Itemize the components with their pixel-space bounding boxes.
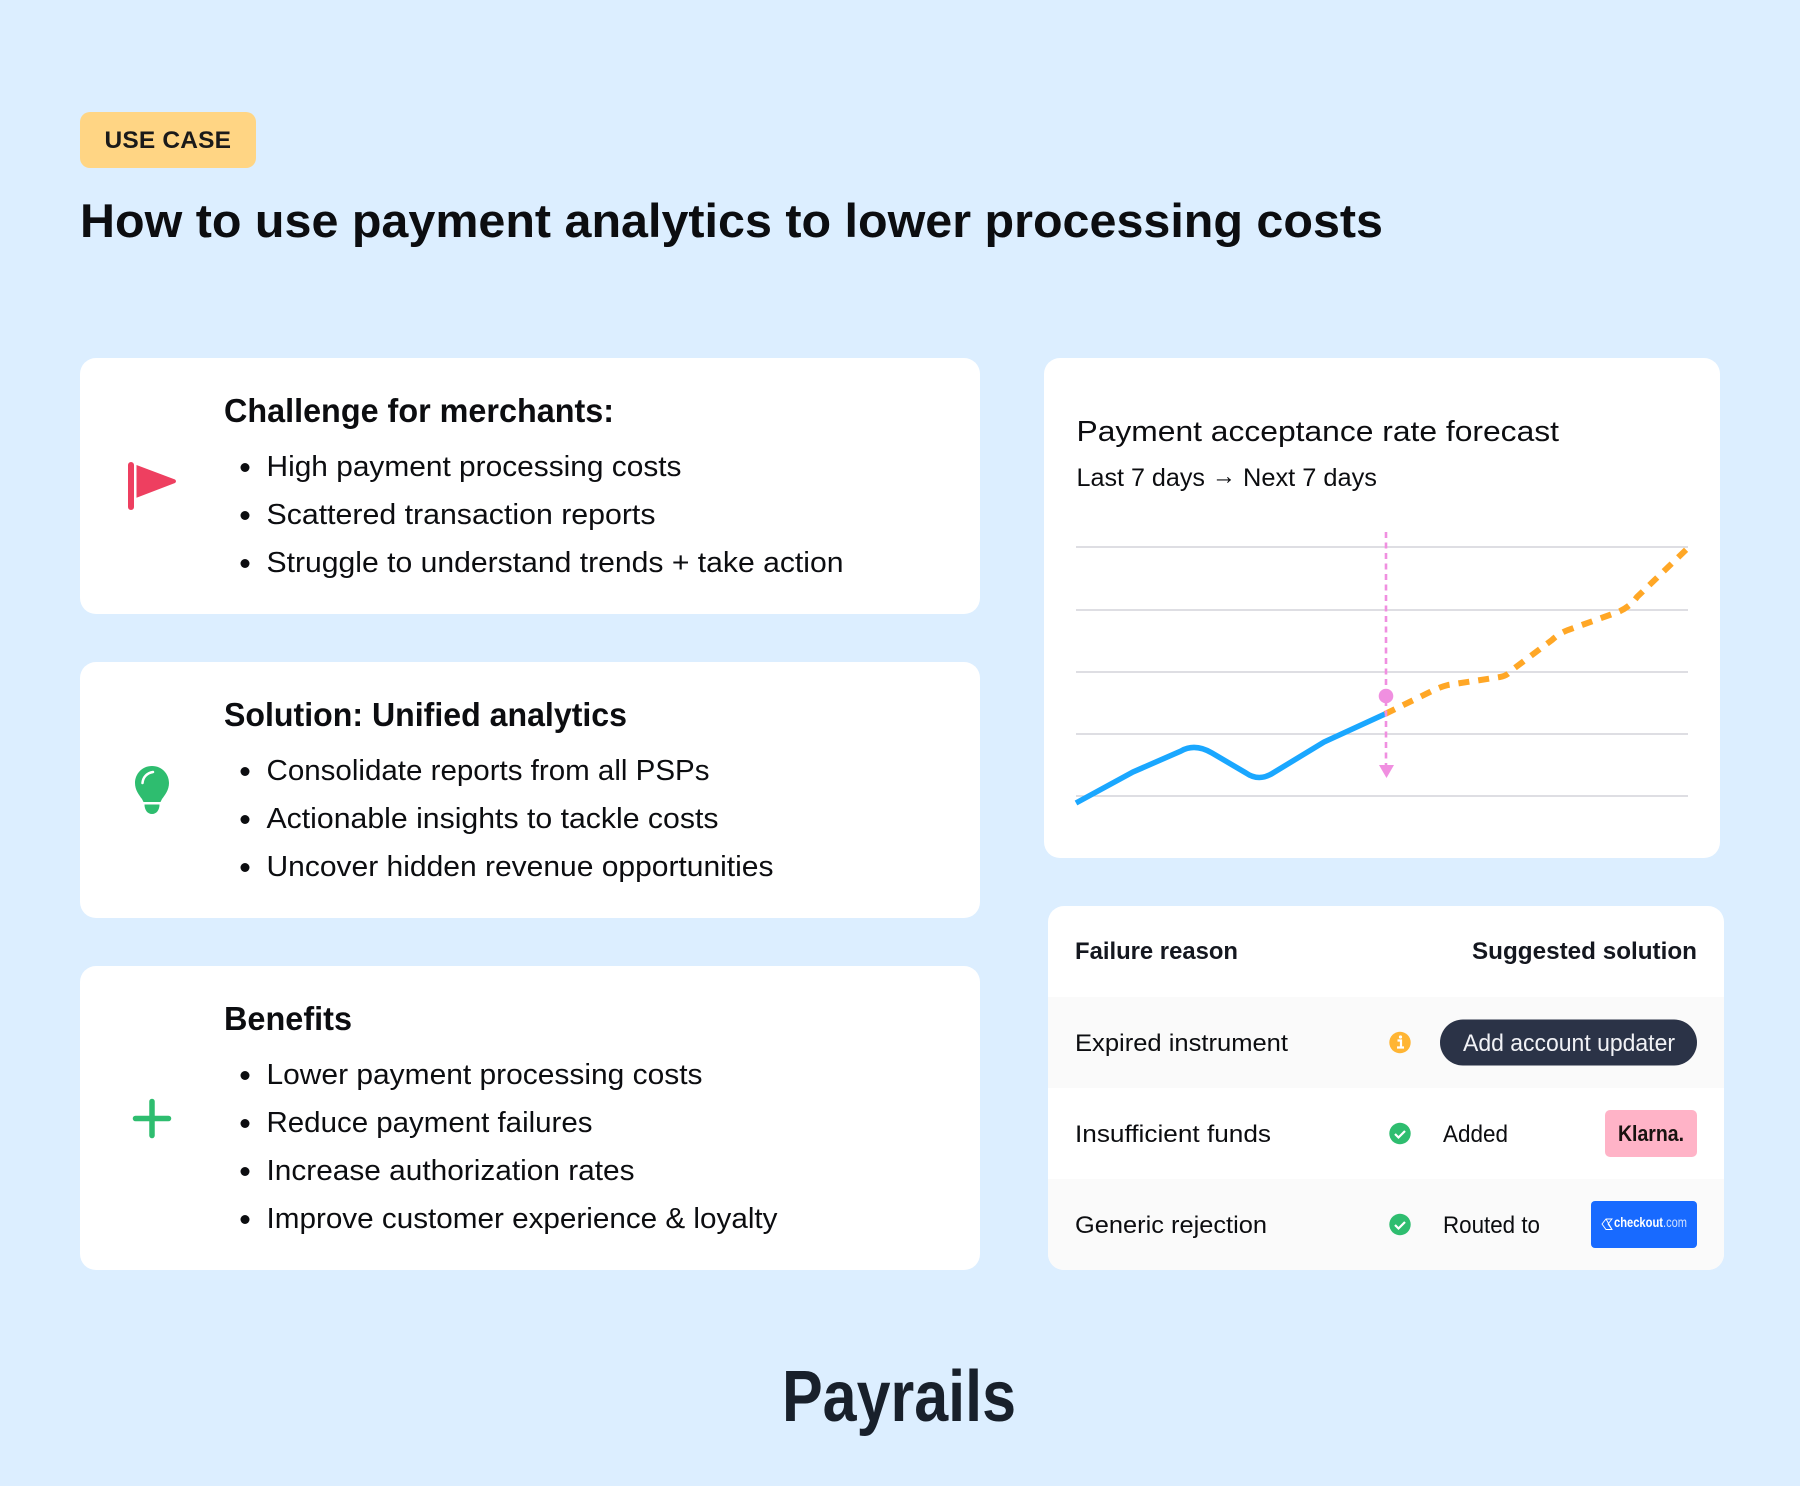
logo: klarna: Klarna. bbox=[1618, 1121, 1684, 1146]
button: add account updater bbox=[1440, 1020, 1697, 1066]
chart subtitle bbox=[1076, 462, 1377, 492]
row: insufficient funds bbox=[1075, 1110, 1697, 1157]
marker: today line with arrow bbox=[1379, 532, 1394, 778]
panel: forecast chart bbox=[1044, 358, 1720, 858]
logo: checkout.com bbox=[1591, 1201, 1697, 1248]
list: benefit points bbox=[240, 1059, 778, 1235]
row shading bbox=[1048, 997, 1724, 1270]
icon: light bulb bbox=[135, 766, 169, 814]
logo: checkout.com: .com bbox=[1663, 1214, 1687, 1230]
list: solution points: Uncover hidden revenue opportunities bbox=[266, 851, 774, 883]
badge: use case: USE CASE bbox=[104, 127, 231, 154]
heading: challenge: Challenge for merchants: bbox=[224, 392, 614, 429]
list: challenge points: High payment processing costs bbox=[266, 451, 682, 483]
list: challenge points bbox=[240, 451, 844, 579]
row: insufficient funds: Insufficient funds bbox=[1075, 1121, 1271, 1148]
panel: failure reasons table bbox=[1048, 906, 1724, 1270]
list: challenge points: Scattered transaction reports bbox=[266, 499, 656, 531]
title: How to use payment analytics to lower processing costs bbox=[80, 194, 1383, 247]
panel: solution bbox=[80, 662, 980, 918]
list: solution points: Consolidate reports from all PSPs bbox=[266, 755, 710, 787]
chart subtitle: Next 7 days bbox=[1243, 464, 1377, 492]
table header: Suggested solution bbox=[1472, 938, 1697, 965]
row: generic rejection: Routed to bbox=[1443, 1212, 1540, 1239]
line: next 7 days forecast bbox=[1385, 546, 1690, 714]
row: expired instrument bbox=[1075, 1020, 1697, 1066]
logo: klarna bbox=[1605, 1110, 1697, 1157]
logo: checkout.com: checkout bbox=[1614, 1214, 1663, 1230]
heading: solution: Solution: Unified analytics bbox=[224, 696, 627, 733]
icon: check bbox=[1389, 1123, 1411, 1144]
list: benefit points: Reduce payment failures bbox=[266, 1107, 592, 1139]
list: benefit points: Increase authorization rates bbox=[266, 1155, 634, 1187]
row: expired instrument: Expired instrument bbox=[1075, 1030, 1288, 1057]
row: insufficient funds: Added bbox=[1443, 1121, 1508, 1148]
logo: payrails: Payrails bbox=[782, 1357, 1016, 1437]
icon: check bbox=[1389, 1214, 1411, 1235]
panel: challenge for merchants bbox=[80, 358, 980, 614]
table header bbox=[1075, 938, 1697, 965]
chart title: Payment acceptance rate forecast bbox=[1076, 416, 1559, 448]
chart subtitle: Last 7 days bbox=[1076, 464, 1205, 492]
list: benefit points: Improve customer experience & loyalty bbox=[266, 1203, 778, 1235]
list: challenge points: Struggle to understand trends + take action bbox=[266, 547, 844, 579]
icon: plus bbox=[136, 1102, 168, 1136]
icon: flag bbox=[128, 462, 176, 510]
list: benefit points: Lower payment processing costs bbox=[266, 1059, 702, 1091]
line: last 7 days bbox=[1076, 714, 1385, 803]
chart subtitle: → bbox=[1212, 462, 1236, 490]
list: solution points bbox=[240, 755, 774, 883]
row: generic rejection: Generic rejection bbox=[1075, 1212, 1267, 1239]
badge: use case bbox=[80, 112, 256, 168]
table header: Failure reason bbox=[1075, 938, 1238, 965]
button: add account updater: Add account updater bbox=[1463, 1030, 1675, 1057]
row: generic rejection bbox=[1075, 1201, 1697, 1248]
heading: benefits: Benefits bbox=[224, 1000, 352, 1037]
panel: benefits bbox=[80, 966, 980, 1270]
list: solution points: Actionable insights to tackle costs bbox=[266, 803, 718, 835]
icon: info bbox=[1389, 1032, 1411, 1053]
